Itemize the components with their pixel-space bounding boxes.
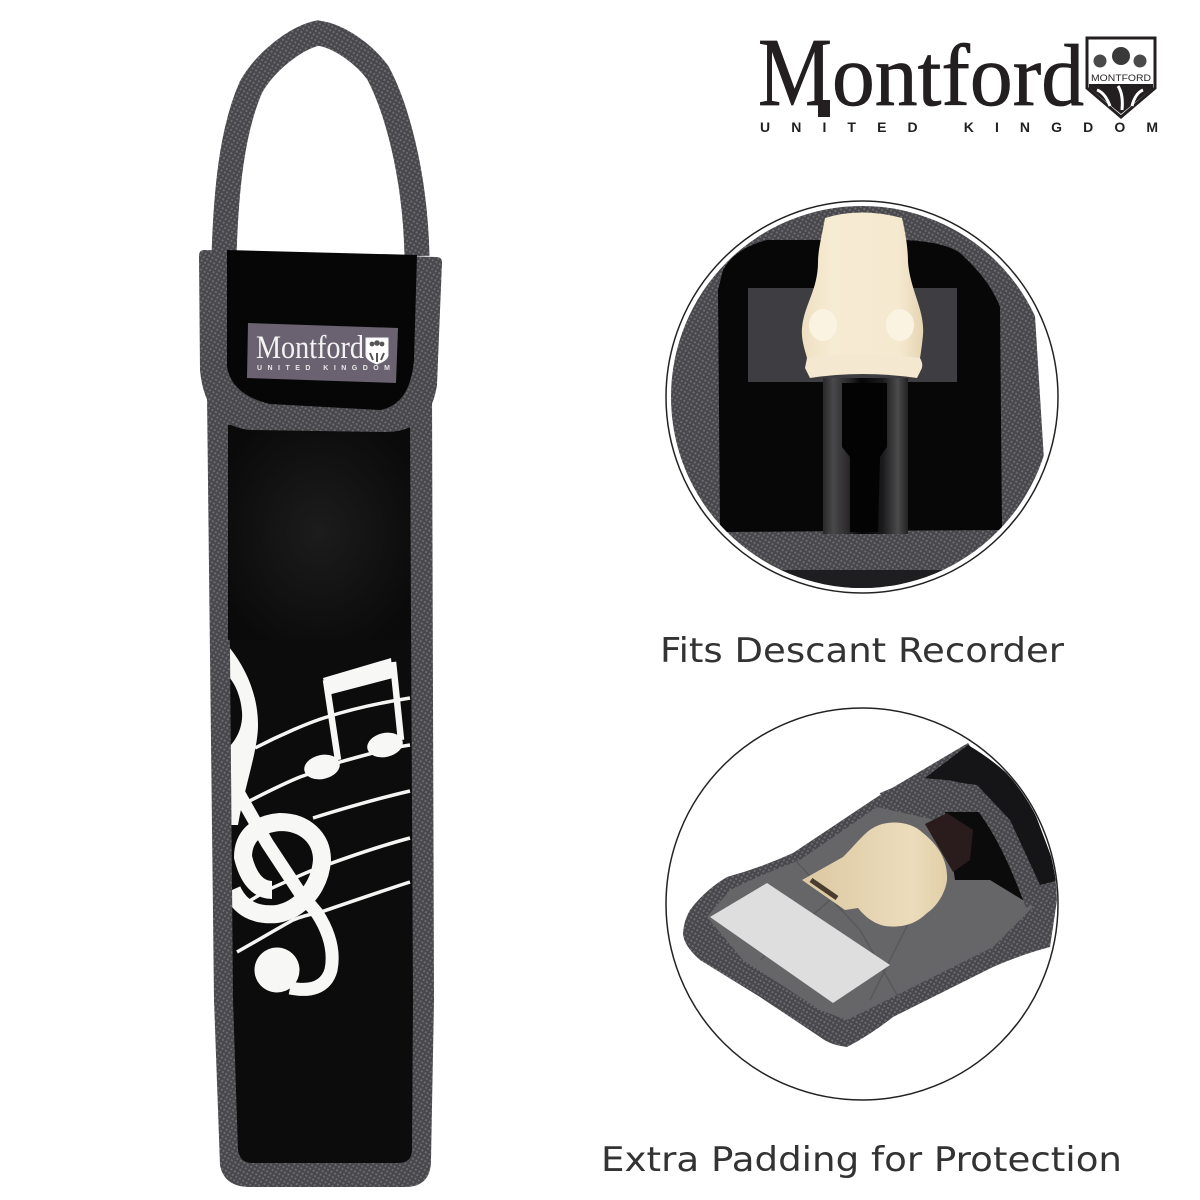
padded flap xyxy=(683,743,1057,1047)
music staff and notes xyxy=(229,647,410,992)
recorder tube xyxy=(823,378,908,534)
outer black bag xyxy=(925,745,1060,885)
quilt seams xyxy=(760,860,920,1000)
logo: Montford United Kingdom: ontford xyxy=(832,28,1084,125)
pouch opening xyxy=(945,812,1026,902)
brand patch: UNITED KINGDOM xyxy=(257,365,390,372)
logo: Montford United Kingdom xyxy=(758,19,1158,135)
staff lines xyxy=(232,698,410,952)
panel: circle photo extra padding xyxy=(666,708,1060,1100)
caption: Fits Descant Recorder: Fits Descant Recorder xyxy=(660,631,1064,671)
pouch trim xyxy=(668,205,1044,600)
icon: logo crest xyxy=(1087,38,1155,117)
bag flap xyxy=(199,250,442,432)
pouch bottom shadow xyxy=(781,570,943,588)
caption: Extra Padding for Protection: Extra Padding for Protection xyxy=(601,1140,1122,1180)
brand patch: Montford xyxy=(256,330,364,366)
quilted lining xyxy=(707,807,1033,1020)
logo: Montford United Kingdom: UNITED KINGDOM xyxy=(760,119,1158,135)
pouch interior xyxy=(718,240,1002,532)
opening trim xyxy=(883,787,1033,905)
panel: recorder bag xyxy=(199,250,442,1187)
recorder xyxy=(802,813,973,927)
icon: bag handle strap xyxy=(224,33,417,256)
velcro strip xyxy=(748,288,957,382)
velcro patch xyxy=(710,883,890,1003)
recorder head xyxy=(802,212,923,378)
eighth notes xyxy=(302,658,405,782)
panel: circle photo descant recorder xyxy=(666,201,1058,600)
logo: Montford United Kingdom: M xyxy=(758,19,832,127)
icon: logo crest: MONTFORD xyxy=(1091,73,1152,83)
treble clef xyxy=(229,647,332,992)
brand patch xyxy=(247,323,398,383)
